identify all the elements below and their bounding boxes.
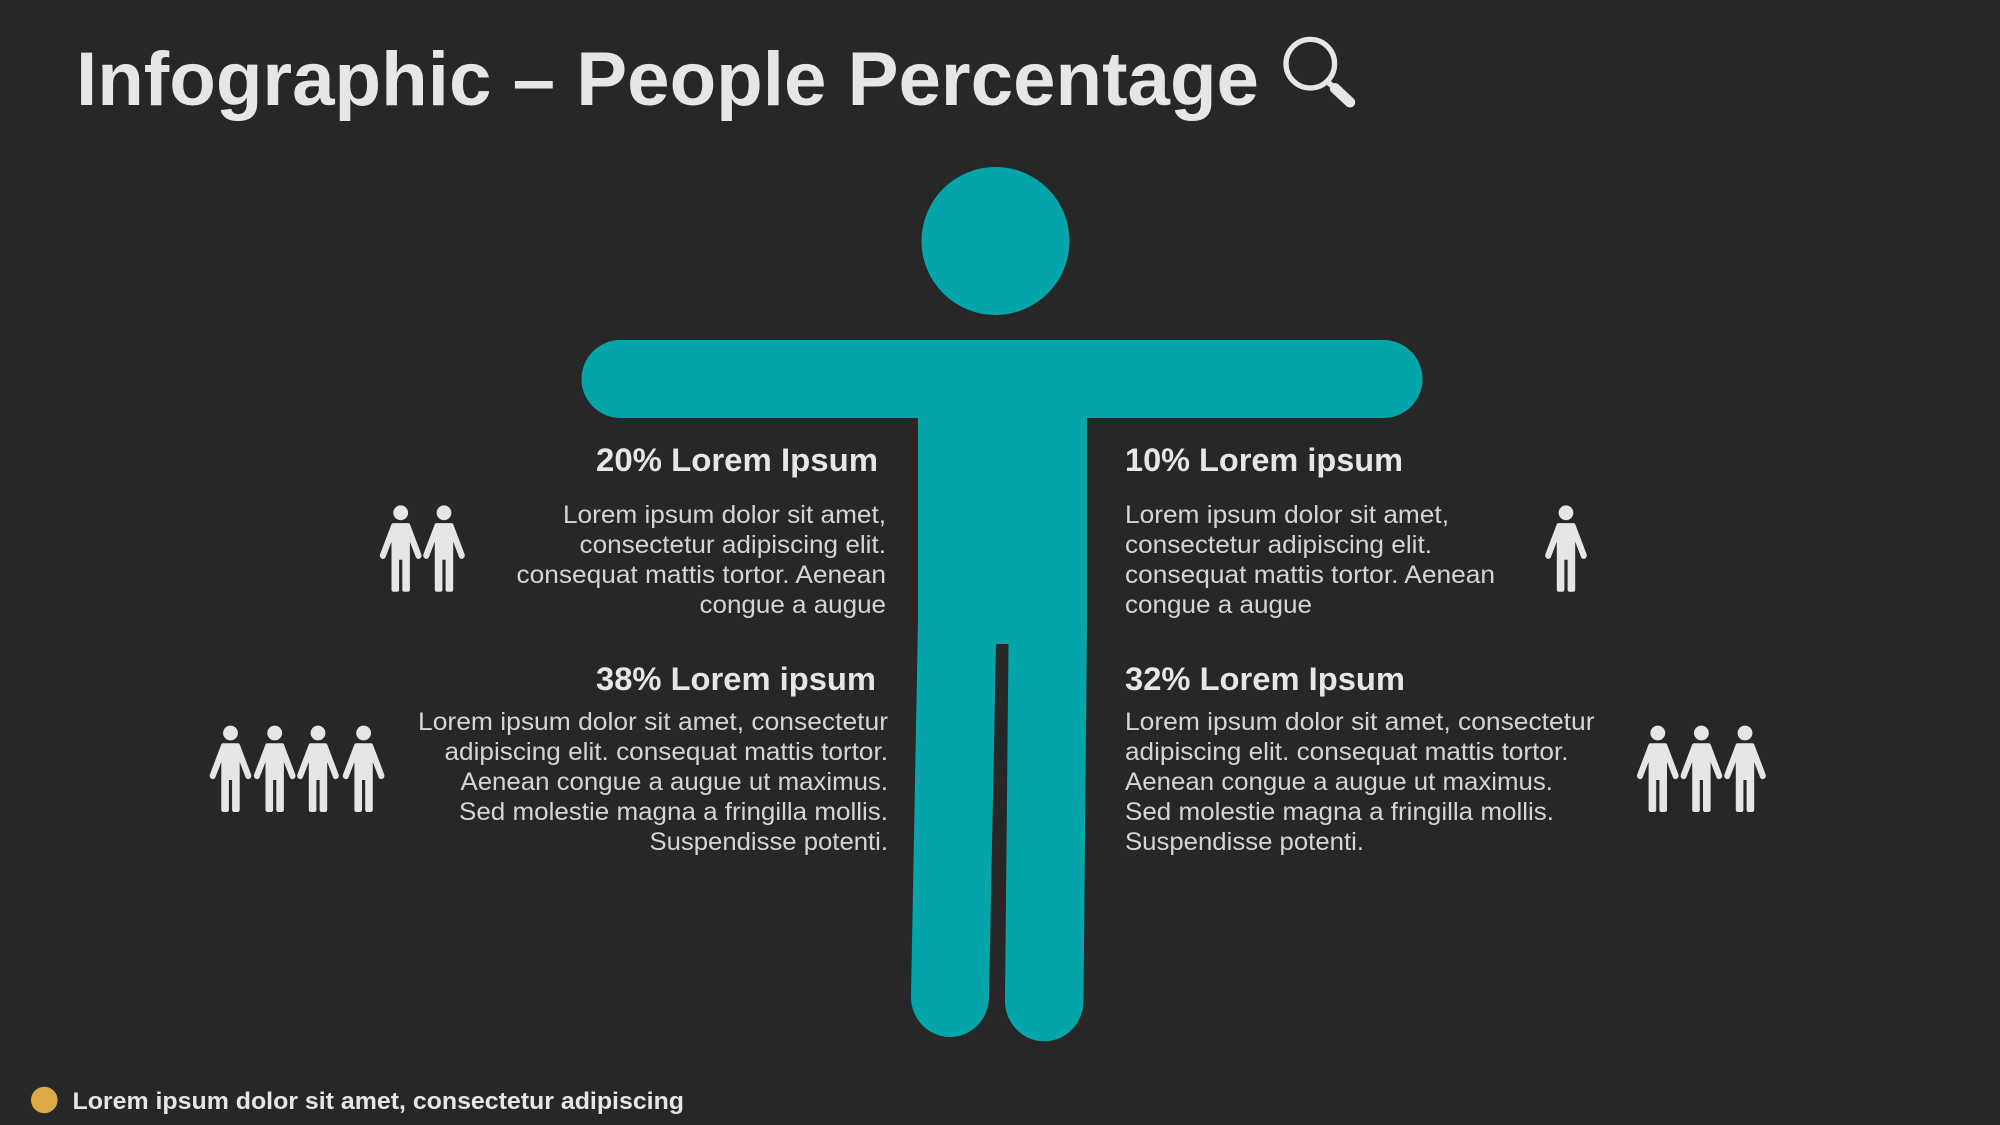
heading: 32%: 32% Lorem Ipsum <box>1125 661 1405 697</box>
footer legend <box>31 1087 684 1115</box>
text block: 38%: adipiscing elit. consequat mattis tortor. <box>444 738 888 766</box>
figure torso and legs <box>911 340 1087 1041</box>
icon: four people <box>210 726 384 812</box>
text block: 20%: consectetur adipiscing elit. <box>580 531 886 559</box>
icon: one person <box>1545 505 1587 592</box>
panel: 20% block <box>516 442 886 619</box>
text block: 10% <box>1125 501 1495 619</box>
text block: 38%: Aenean congue a augue ut maximus. <box>460 768 888 796</box>
text block: 32% <box>1125 708 1594 856</box>
panel: 10% block <box>1125 442 1495 619</box>
heading: 38%: 38% Lorem ipsum <box>596 661 876 697</box>
heading: 20%: 20% Lorem Ipsum <box>596 442 878 478</box>
text block: 10%: consequat mattis tortor. Aenean <box>1125 561 1495 589</box>
text block: 20%: consequat mattis tortor. Aenean <box>516 561 886 589</box>
icon: two people <box>380 505 465 592</box>
text block: 10%: congue a augue <box>1125 591 1312 619</box>
panel: 38% block <box>418 661 888 856</box>
text block: 20%: Lorem ipsum dolor sit amet, <box>563 501 886 529</box>
heading: 10%: 10% Lorem ipsum <box>1125 442 1403 478</box>
text block: 20% <box>516 501 886 619</box>
figure arms <box>582 340 1422 418</box>
legend text: Lorem ipsum dolor sit amet, consectetur adipiscing <box>72 1088 684 1115</box>
icon: three people <box>1637 726 1766 812</box>
text block: 32%: adipiscing elit. consequat mattis tortor. <box>1125 738 1568 766</box>
icon: magnifying glass <box>1286 39 1350 102</box>
central person figure <box>582 167 1422 1041</box>
text block: 10%: consectetur adipiscing elit. <box>1125 531 1432 559</box>
text block: 20%: congue a augue <box>700 591 886 619</box>
text block: 38%: Suspendisse potenti. <box>650 828 888 856</box>
figure head <box>922 167 1070 315</box>
text block: 32%: Suspendisse potenti. <box>1125 828 1364 856</box>
text block: 38% <box>418 708 888 856</box>
panel: 32% block <box>1125 661 1594 856</box>
text block: 32%: Sed molestie magna a fringilla mollis. <box>1125 798 1554 826</box>
text block: 32%: Lorem ipsum dolor sit amet, consectetur <box>1125 708 1594 736</box>
text block: 10%: Lorem ipsum dolor sit amet, <box>1125 501 1449 529</box>
text block: 38%: Sed molestie magna a fringilla mollis. <box>459 798 888 826</box>
text block: 38%: Lorem ipsum dolor sit amet, consectetur <box>418 708 888 736</box>
text block: 32%: Aenean congue a augue ut maximus. <box>1125 768 1553 796</box>
title: Infographic – People Percentage <box>76 37 1259 122</box>
legend dot <box>31 1087 58 1113</box>
